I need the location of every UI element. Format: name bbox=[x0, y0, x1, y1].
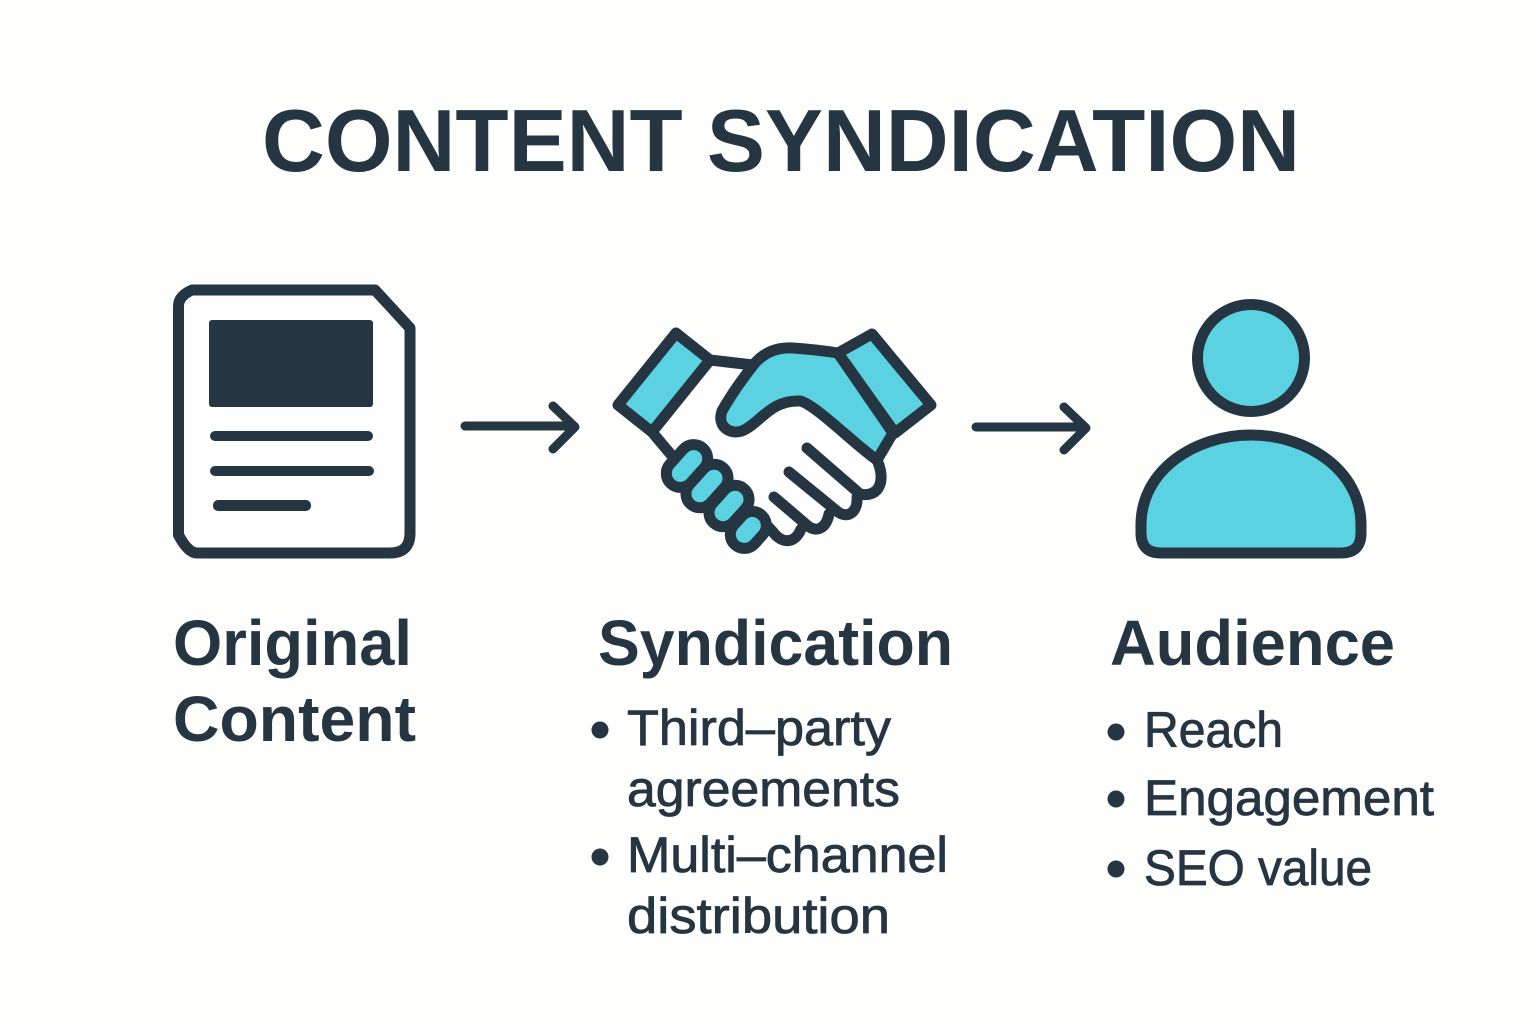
list: audience points: Engagement bbox=[1144, 770, 1434, 826]
white hands base bbox=[652, 360, 881, 540]
arrow: syndication to audience bbox=[976, 407, 1086, 450]
column label: Audience: Audience bbox=[1110, 607, 1395, 679]
list: audience points: SEO value bbox=[1144, 840, 1372, 896]
title: CONTENT SYNDICATION bbox=[262, 91, 1300, 190]
column label: Syndication: Syndication bbox=[598, 607, 953, 679]
column label: Original Content: Content bbox=[173, 683, 416, 755]
icon: handshake bbox=[618, 333, 931, 554]
right cuff bbox=[838, 334, 931, 433]
icon: audience person bbox=[1141, 304, 1361, 553]
left wrist edges bbox=[652, 360, 753, 457]
list: audience points bbox=[1108, 702, 1434, 896]
arrow: content to syndication bbox=[465, 406, 575, 449]
list: syndication points: Third–party bbox=[627, 700, 891, 756]
list: syndication points: agreements bbox=[627, 761, 900, 817]
column label: Original Content: Original bbox=[173, 607, 412, 679]
column label: Original Content bbox=[173, 607, 416, 755]
knuckles bbox=[661, 439, 772, 554]
left cuff bbox=[618, 333, 710, 432]
icon: original content document bbox=[178, 290, 410, 553]
list: audience points: Reach bbox=[1144, 702, 1283, 758]
list: syndication points: Multi–channel bbox=[627, 827, 948, 883]
right hand cyan bbox=[721, 348, 893, 460]
list: syndication points: distribution bbox=[627, 888, 890, 944]
list: syndication points bbox=[592, 700, 948, 944]
fingers bbox=[760, 448, 881, 541]
